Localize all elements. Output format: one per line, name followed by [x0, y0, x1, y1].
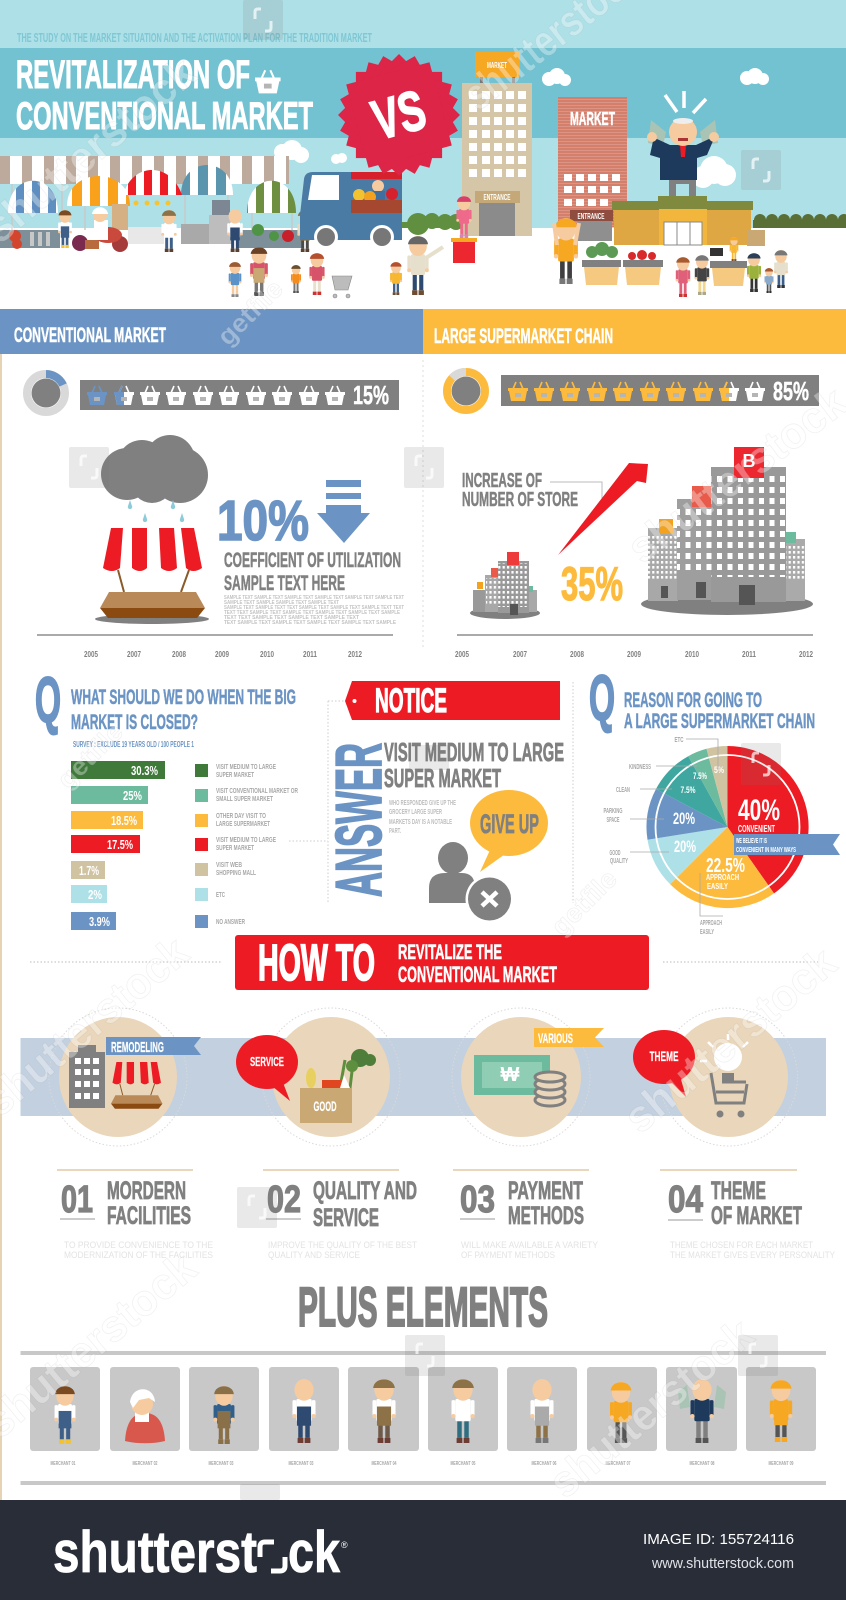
- dotted separators: [30, 961, 818, 963]
- card captions: MERCHANT 04: [372, 1461, 397, 1467]
- character cards: [30, 1367, 816, 1467]
- legend: survey: VISIT MEDIUM TO LARGE: [216, 837, 276, 844]
- timeline: right: 2008: [570, 650, 584, 659]
- cloud: [692, 156, 736, 188]
- icon: market stall: [95, 528, 209, 624]
- legend: survey: NO ANSWER: [216, 919, 245, 926]
- pie labels: 40%: [738, 794, 780, 827]
- step 3: WILL MAKE AVAILABLE A VARIETY: [461, 1240, 598, 1250]
- legend: survey: [195, 764, 298, 928]
- band: how to backdrop: [20, 1038, 826, 1116]
- timeline: right: 2009: [627, 650, 641, 659]
- watermark overlay: shutterstock: [540, 1309, 763, 1508]
- character: girl on bin: [451, 196, 477, 263]
- text: increase of number of store: NUMBER OF STORE: [462, 489, 578, 511]
- building: beige tower: [462, 52, 532, 236]
- character: merchant 2: [92, 207, 122, 243]
- card captions: MERCHANT 05: [450, 1461, 476, 1467]
- logo: shutterstock: ck: [288, 1520, 341, 1585]
- image id: IMAGE ID: 155724116: [643, 1531, 794, 1548]
- building: beige tower: MARKET: [487, 61, 507, 70]
- legend: survey: SUPER MARKET: [216, 772, 254, 779]
- timeline: left: 2012: [348, 650, 362, 659]
- building: supermarket: [612, 196, 765, 246]
- step 4: THEME CHOSEN FOR EACH MARKET: [670, 1240, 813, 1250]
- text: sample body: [224, 595, 404, 626]
- character: merchant 3: [161, 210, 177, 252]
- character: merchant card 10: [770, 1380, 792, 1442]
- text: sample body: SAMPLE TEXT SAMPLE SAMPLE TEXT SAMPLE TEXT: [224, 600, 339, 606]
- step 1: FACILITIES: [107, 1202, 191, 1230]
- pie callouts: KINDNESS: [629, 764, 651, 771]
- character: merchant card 3: [213, 1386, 235, 1444]
- character: merchant 5: [297, 210, 313, 252]
- timeline: left: 2007: [127, 650, 141, 659]
- text: sample body: TEXT TEXT SAMPLE TEXT SAMPLE TEXT SAMPLE TEXT: [224, 615, 359, 621]
- stall: green dome: [247, 181, 296, 213]
- timeline: right: 2012: [799, 650, 813, 659]
- text: answer details: GROCERY LARGE SUPER: [389, 809, 442, 816]
- character: worker: [554, 218, 579, 284]
- character: merchant card 8: [610, 1382, 632, 1443]
- VS seal: [338, 54, 460, 176]
- timeline: right: 2005: [455, 650, 469, 659]
- bar chart: survey: 18.5%: [111, 813, 137, 828]
- title: REVITALIZATION OF: [16, 53, 250, 97]
- building: red market: MARKET: [570, 109, 615, 129]
- stalls: striped awning: [0, 156, 289, 184]
- timeline: left: [37, 634, 393, 659]
- stall: red umbrella: [123, 170, 182, 206]
- step icon 1: modern facilities: [49, 1008, 201, 1146]
- card captions: MERCHANT 06: [532, 1461, 557, 1467]
- card captions: MERCHANT 01: [50, 1461, 76, 1467]
- bar chart: survey: 17.5%: [107, 837, 133, 852]
- counter: white: [128, 227, 164, 244]
- bar chart: survey: 30.3%: [131, 763, 158, 778]
- step icon 4: theme: [633, 1008, 798, 1146]
- band: conventional market: [0, 309, 423, 354]
- building: beige tower: ENTRANCE: [484, 193, 511, 202]
- text: sample body: SAMPLE TEXT SAMPLE TEXT SAMPLE TEXT SAMPLE TEXT SAMPLE TEXT SAMPLE TEXT: [224, 595, 404, 601]
- stall: teal dome: [181, 165, 233, 195]
- character: merchant 4: [227, 209, 243, 252]
- subtitle: THE STUDY ON THE MARKET SITUATION AND THE ACTIVATION PLAN FOR THE TRADITION MARKET: [17, 30, 372, 45]
- Q: right question: Q: [589, 662, 615, 734]
- cloud: [331, 153, 347, 164]
- step icon 3: payment: ₩: [501, 1064, 520, 1086]
- text: answer details: WHO RESPONDED GIVE UP THE: [389, 800, 456, 807]
- step 2: SERVICE: [313, 1204, 379, 1232]
- icon: title basket: [255, 70, 281, 93]
- character: merchant card 2: [125, 1389, 165, 1443]
- pie callouts: [604, 737, 723, 936]
- step 4: [660, 1169, 835, 1260]
- bar chart: survey: 25%: [123, 788, 142, 803]
- watermark overlay: getfile: [211, 273, 289, 351]
- cloud: [542, 68, 571, 86]
- step 1: MODERNIZATION OF THE FACILITIES: [64, 1250, 213, 1260]
- banner: how to: HOW TO: [258, 934, 375, 991]
- heading: plus elements: PLUS ELEMENTS: [298, 1275, 548, 1338]
- counter: fish: [0, 230, 60, 249]
- step 2: IMPROVE THE QUALITY OF THE BEST: [268, 1240, 417, 1250]
- bushes: [402, 213, 464, 235]
- bar chart: survey: [71, 761, 165, 930]
- stat: 10%: 10%: [217, 489, 309, 553]
- title: [16, 53, 313, 138]
- step 4: 04: [668, 1179, 703, 1221]
- step 4: THEME: [711, 1177, 766, 1205]
- counter: vegetables: [238, 224, 304, 248]
- banner: how to: REVITALIZE THE: [398, 941, 502, 964]
- pie labels: [673, 765, 780, 891]
- legend: survey: LARGE SUPERMARKET: [216, 821, 270, 828]
- character: merchant card 7: [530, 1379, 554, 1443]
- step icon 2: quality: GOOD: [314, 1098, 336, 1114]
- text: answer details: MARKETS DAY IS A NOTABLE: [389, 819, 452, 826]
- timeline: right: [455, 634, 813, 659]
- text: sample body: SAMPLE TEXT SAMPLE TEXT TEXT SAMPLE TEXT SAMPLE TEXT SAMPLE TEXT TEXT: [224, 605, 404, 611]
- ribbon: convenient: [734, 834, 840, 855]
- bar chart: survey: 1.7%: [79, 863, 99, 878]
- pie callouts: APPROACH: [700, 920, 722, 927]
- character: merchant card 5: [372, 1379, 396, 1443]
- legend: survey: VISIT WEB: [216, 862, 242, 869]
- text: sample body: TEXT TEXT SAMPLE TEXT SAMPLE TEXT SAMPLE TEXT SAMPLE TEXT SAMPLE: [224, 610, 401, 616]
- timeline: left: 2005: [84, 650, 98, 659]
- stall: goods: [72, 204, 128, 252]
- banner: how to: [235, 934, 649, 991]
- step 3: 03: [460, 1179, 495, 1221]
- pie labels: EASILY: [707, 882, 728, 891]
- VS seal: VS: [366, 77, 432, 152]
- step 2: QUALITY AND: [313, 1177, 417, 1205]
- bar chart: survey: 3.9%: [89, 914, 110, 929]
- ribbon: convenient: WE BELIEVE IT IS: [736, 838, 767, 845]
- text: coefficient: SAMPLE TEXT HERE: [224, 572, 345, 595]
- step 2: [263, 1169, 417, 1260]
- characters: family with cart: [229, 247, 352, 298]
- step 2: QUALITY AND SERVICE: [268, 1250, 360, 1260]
- step 1: TO PROVIDE CONVENIENCE TO THE: [64, 1240, 213, 1250]
- cloud: [740, 68, 769, 85]
- icon: person with x: [429, 842, 514, 923]
- building: red market: [558, 97, 627, 241]
- pie callouts: GOOD: [610, 850, 620, 857]
- pie labels: 20%: [673, 809, 695, 828]
- text: sample body: TEXT SAMPLE TEXT SAMPLE TEXT SAMPLE TEXT SAMPLE TEXT SAMPLE: [224, 620, 397, 626]
- question heading: WHAT SHOULD WE DO WHEN THE BIG: [71, 686, 296, 709]
- ribbon: convenient: CONVENIENT IN MANY WAYS: [736, 847, 796, 854]
- icon: down arrow: [317, 480, 370, 543]
- step 2: 02: [267, 1179, 301, 1221]
- watermark overlay: getfile: [545, 863, 623, 941]
- cloud: [274, 140, 309, 163]
- timeline: right: 2007: [513, 650, 527, 659]
- text: answer: ANSWER: [322, 743, 395, 897]
- pie labels: 7.5%: [680, 785, 696, 795]
- character: merchant card 9: [678, 1379, 726, 1443]
- band: conventional market: CONVENTIONAL MARKET: [14, 324, 166, 347]
- rule top: [20, 1351, 826, 1355]
- text: visit medium: SUPER MARKET: [384, 763, 501, 793]
- watermark squares: [69, 0, 781, 1500]
- building: red market: ENTRANCE: [578, 212, 605, 221]
- stall poles: [12, 184, 292, 230]
- rule bottom: [20, 1481, 826, 1485]
- pie chart: [647, 746, 809, 908]
- logo: shutterstock: ®: [341, 1540, 348, 1550]
- character: pointing man: [407, 236, 443, 295]
- counter: gray: [181, 200, 233, 244]
- donut: conventional 15%: [27, 374, 65, 412]
- character: boy: [390, 262, 402, 295]
- timeline: left: 2008: [172, 650, 186, 659]
- title: CONVENTIONAL MARKET: [16, 95, 313, 138]
- step 3: [453, 1169, 598, 1260]
- banner: how to: CONVENTIONAL MARKET: [398, 962, 557, 987]
- step 3: PAYMENT: [508, 1177, 583, 1205]
- text: coefficient: [224, 549, 401, 595]
- pie callouts: ETC: [674, 737, 684, 744]
- step 1: [57, 1169, 213, 1260]
- pie callouts: QUALITY: [610, 858, 628, 865]
- watermark overlay: getfile: [51, 716, 129, 794]
- bubble: theme: [633, 1030, 695, 1097]
- tag: notice: NOTICE: [375, 682, 447, 720]
- logo: shutterstock: shutterst: [53, 1520, 257, 1585]
- legend: survey: SHOPPING MALL: [216, 870, 256, 877]
- question heading: MARKET IS CLOSED?: [71, 711, 198, 734]
- website: www.shutterstock.com: [651, 1555, 794, 1572]
- speech bubble: give up: GIVE UP: [480, 809, 539, 839]
- ribbon: various: VARIOUS: [538, 1030, 573, 1046]
- cashier counter: [710, 237, 747, 286]
- donut: supermarket 85%: [447, 372, 485, 410]
- card captions: MERCHANT 02: [132, 1461, 158, 1467]
- legend: survey: VISIT CONVENTIONAL MARKET OR: [216, 788, 298, 795]
- text: increase of number of store: INCREASE OF: [462, 470, 542, 492]
- bubble: theme: THEME: [650, 1048, 678, 1064]
- connector: [550, 482, 602, 507]
- pie labels: 7.5%: [693, 771, 707, 781]
- Q: left question: SURVEY : EXCLUDE 19 YEARS OLD / 100 PEOPLE 1: [73, 740, 194, 749]
- vertical divider: [422, 360, 424, 650]
- speech bubble: give up: [470, 790, 548, 872]
- step icon 2: quality: [236, 1008, 400, 1146]
- pie labels: CONVENIENT: [738, 824, 775, 835]
- pie callouts: PARKING: [604, 808, 623, 815]
- text: answer details: [389, 800, 456, 835]
- bushes: [753, 214, 846, 228]
- stall: blue dome: [8, 181, 58, 213]
- text: visit medium: [384, 737, 564, 793]
- card captions: [50, 1461, 794, 1467]
- step 3: OF PAYMENT METHODS: [461, 1250, 555, 1260]
- stat: 35%: 35%: [561, 557, 623, 610]
- left border: [0, 0, 2, 1500]
- band: large supermarket chain: LARGE SUPERMARKET CHAIN: [434, 325, 613, 348]
- bar: baskets 15%: 15%: [353, 380, 389, 410]
- characters: shoppers: [676, 250, 788, 297]
- card captions: MERCHANT 07: [606, 1461, 631, 1467]
- text: coefficient: COEFFICIENT OF UTILIZATION: [224, 549, 401, 572]
- step 3: METHODS: [508, 1202, 584, 1230]
- bar: baskets 85%: [501, 375, 819, 406]
- timeline: left: 2009: [215, 650, 229, 659]
- question heading: [71, 686, 296, 734]
- text: visit medium: VISIT MEDIUM TO LARGE: [384, 737, 564, 767]
- character: merchant card 4: [292, 1379, 316, 1443]
- pie callouts: EASILY: [700, 929, 714, 936]
- step 1: 01: [61, 1179, 93, 1221]
- pie labels: APPROACH: [706, 873, 739, 882]
- step icon 3: payment: [452, 1008, 604, 1146]
- character: merchant card 6: [451, 1379, 475, 1443]
- footer: [0, 1500, 846, 1600]
- stall: orange dome: [67, 176, 130, 206]
- pie labels: 20%: [674, 837, 696, 856]
- character: merchant card 1: [54, 1386, 76, 1444]
- Q: left question: [35, 664, 296, 749]
- step 1: MORDERN: [107, 1177, 186, 1205]
- building: large: [641, 447, 813, 615]
- dotted connectors: [289, 682, 573, 903]
- Q: left question: Q: [35, 664, 61, 736]
- bar: baskets 15%: [80, 380, 399, 410]
- pie labels: 5%: [714, 765, 724, 775]
- text: answer details: PART.: [389, 828, 401, 835]
- card captions: MERCHANT 09: [768, 1461, 794, 1467]
- pie labels: 22.5%: [706, 855, 745, 877]
- legend: survey: OTHER DAY VISIT TO: [216, 813, 266, 820]
- timeline: left: 2011: [303, 650, 317, 659]
- legend: survey: ETC: [216, 892, 225, 899]
- bubble: service: [236, 1035, 298, 1101]
- icon: rain cloud: [101, 435, 208, 522]
- text: increase of number of store: [462, 470, 578, 511]
- band: large supermarket chain: [423, 309, 846, 354]
- heading: reason: [624, 689, 815, 733]
- arrow: growth: [558, 463, 648, 555]
- pie callouts: SPACE: [606, 817, 620, 824]
- watermark overlay: shutterstock: [615, 938, 846, 1143]
- card captions: MERCHANT 03: [288, 1461, 314, 1467]
- building: small: [470, 552, 540, 619]
- ribbon: remodeling: REMODELING: [111, 1039, 164, 1056]
- pie callouts: CLEAN: [616, 787, 630, 794]
- timeline: right: 2010: [685, 650, 699, 659]
- legend: survey: VISIT MEDIUM TO LARGE: [216, 764, 276, 771]
- character: merchant 1: [58, 210, 72, 248]
- legend: survey: SMALL SUPER MARKET: [216, 796, 273, 803]
- bar: baskets 85%: 85%: [773, 376, 809, 406]
- panel: header illustration: [0, 0, 846, 309]
- bubble: service: SERVICE: [250, 1054, 284, 1069]
- card captions: MERCHANT 08: [690, 1461, 715, 1467]
- building: large: B: [742, 451, 756, 471]
- character: boss with fans: [647, 91, 719, 196]
- card captions: MERCHANT 03: [208, 1461, 234, 1467]
- truck: [300, 172, 402, 249]
- bar chart: survey: 2%: [88, 887, 102, 902]
- legend: survey: SUPER MARKET: [216, 845, 254, 852]
- timeline: right: 2011: [742, 650, 756, 659]
- timeline: left: 2010: [260, 650, 274, 659]
- tag: notice: [345, 681, 560, 720]
- vegetable bins: [582, 242, 663, 285]
